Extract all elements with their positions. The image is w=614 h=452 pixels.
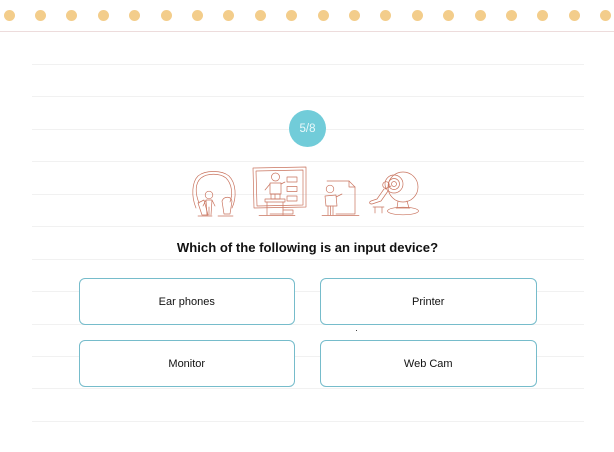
answer: Monitor: [78, 340, 295, 386]
answer: Web Cam: Web Cam: [404, 358, 453, 370]
icon: printer with person: [322, 181, 359, 216]
icon: monitor with presenter: [253, 167, 306, 216]
answer: Ear phones: [78, 278, 295, 324]
icon: headphones with person: [193, 172, 235, 216]
progress badge: 5/8: [289, 110, 326, 146]
answer: Ear phones: Ear phones: [159, 296, 215, 308]
question heading: Which of the following is an input device?: [177, 240, 438, 255]
answer: Web Cam: [320, 340, 536, 386]
answer: Printer: [320, 278, 536, 324]
dotted top border: [0, 0, 614, 32]
icon: webcam with person: [370, 172, 418, 215]
answer: Monitor: Monitor: [168, 358, 205, 370]
progress badge: 5/8: 5/8: [300, 122, 316, 134]
illustrations: four input and output devices: [192, 166, 419, 216]
answer: Printer: Printer: [412, 296, 444, 308]
